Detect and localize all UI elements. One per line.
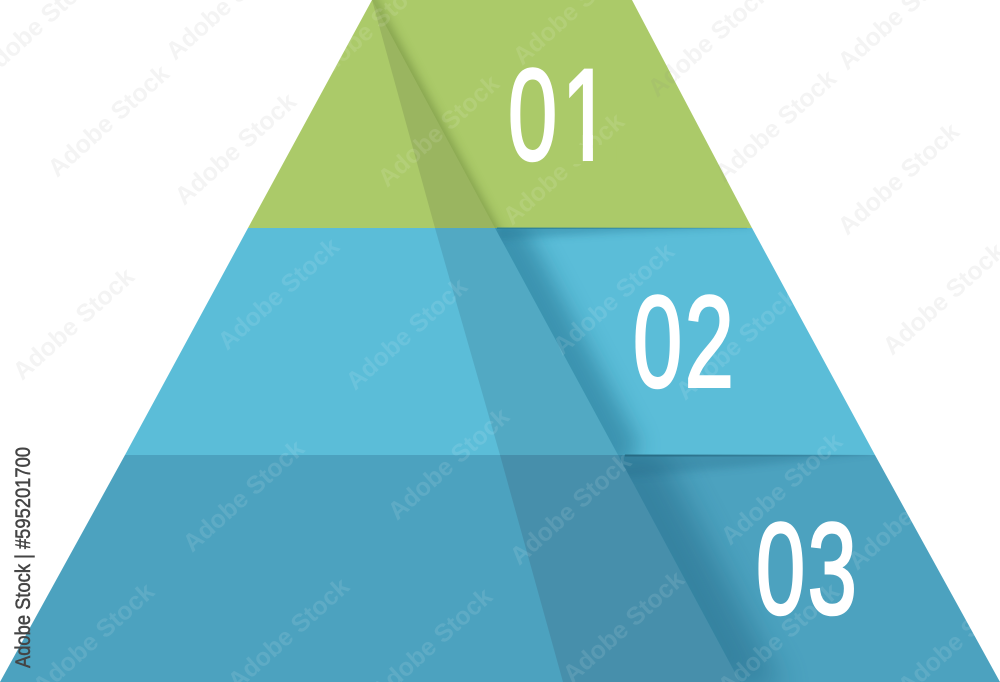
watermark on pyramid: Adobe Stock bbox=[383, 402, 515, 526]
band 3: dark blue bbox=[0, 455, 1000, 682]
number 01: 01 bbox=[508, 41, 611, 188]
watermark on pyramid: Adobe Stock bbox=[843, 452, 975, 576]
watermark on pyramid: Adobe Stock bbox=[178, 434, 310, 558]
watermark on white background: Adobe Stock bbox=[170, 87, 302, 211]
shadow: band 1 bbox=[372, 0, 503, 228]
watermark on white background: Adobe Stock bbox=[710, 64, 842, 188]
fold: band 2 bbox=[435, 228, 618, 455]
shadow line at band 2/3 join bbox=[625, 454, 870, 456]
shadow: band 2 bbox=[495, 228, 736, 455]
watermark on pyramid: Adobe Stock bbox=[373, 69, 505, 193]
band 2: light blue bbox=[125, 228, 875, 455]
fold: band 3 bbox=[500, 455, 740, 682]
shadow: band 3 bbox=[618, 455, 842, 682]
fold: band 1 bbox=[372, 0, 495, 228]
watermark on pyramid: Adobe Stock bbox=[671, 282, 803, 406]
watermark on white background bbox=[0, 0, 1000, 386]
watermark on pyramid: Adobe Stock bbox=[548, 237, 680, 361]
watermark on white background: Adobe Stock bbox=[43, 59, 175, 183]
number 03: 03 bbox=[756, 495, 857, 642]
watermark on pyramid: Adobe Stock bbox=[505, 447, 637, 571]
band 1: green bbox=[248, 0, 752, 228]
watermark on pyramid: Adobe Stock bbox=[341, 272, 473, 396]
watermark on white background: Adobe Stock bbox=[8, 262, 140, 386]
watermark on pyramid: Adobe Stock bbox=[716, 427, 848, 551]
shadow line at band 1/2 join bbox=[497, 228, 747, 229]
watermark on pyramid: Adobe Stock bbox=[213, 232, 345, 356]
watermark on white background: Adobe Stock bbox=[833, 117, 965, 241]
number 02: 02 bbox=[633, 268, 734, 415]
watermark on pyramid: Adobe Stock bbox=[498, 107, 630, 231]
stock id side label: Adobe Stock | #595201700 bbox=[12, 447, 35, 668]
